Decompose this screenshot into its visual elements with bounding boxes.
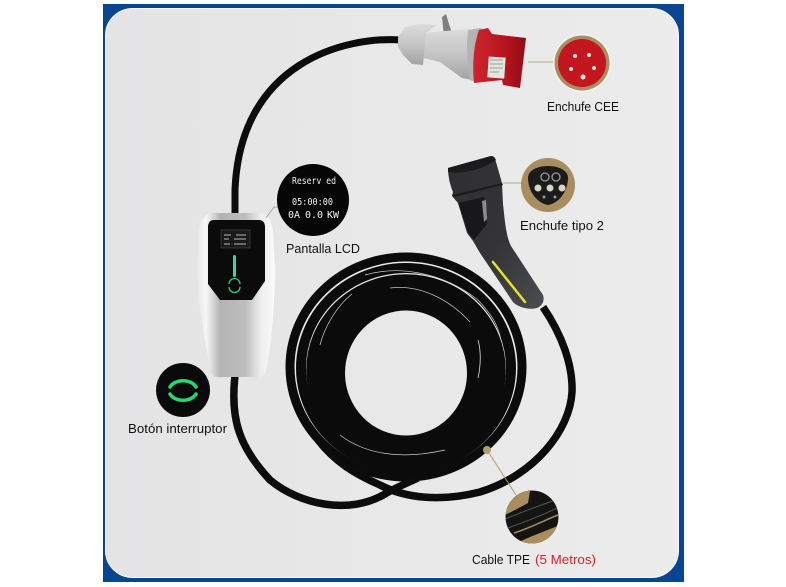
- status light: [233, 255, 236, 277]
- label: Cable TPE (5 Metros): Cable TPE: [472, 553, 530, 567]
- inset: LCD readout: [277, 164, 349, 236]
- display panel: [208, 220, 265, 300]
- cable: handle to coil: [318, 307, 572, 498]
- connector line: LCD: [266, 207, 281, 218]
- inset: CEE socket: [553, 34, 611, 92]
- marker dot: [483, 446, 491, 454]
- inset: cable detail: [505, 490, 560, 546]
- inset: LCD readout: KW: [327, 210, 340, 221]
- label: Cable TPE (5 Metros): (5 Metros): [535, 553, 596, 567]
- small power icon: [229, 278, 240, 292]
- connector line: Type 2: [503, 182, 522, 184]
- inset: LCD readout: 05:00:00: [292, 197, 333, 208]
- light panel: [106, 8, 678, 578]
- cable coil: [290, 257, 522, 477]
- CEE red plug: [398, 14, 526, 88]
- label: Enchufe tipo 2: Enchufe tipo 2: [520, 218, 604, 233]
- inset: Type 2 socket: [521, 158, 575, 212]
- label: Pantalla LCD: Pantalla LCD: [286, 241, 360, 256]
- inset: LCD readout: 0.0: [305, 210, 323, 221]
- label: Cable TPE (5 Metros): [472, 553, 596, 567]
- inset: LCD readout: 0A: [288, 210, 300, 221]
- connector line: cable TPE: [487, 450, 516, 495]
- label: Enchufe CEE: Enchufe CEE: [547, 99, 619, 114]
- cable: plug to control box: [235, 40, 402, 216]
- inset: power button: [156, 363, 210, 417]
- Type 2 connector handle: [448, 156, 544, 309]
- control box: [197, 213, 275, 377]
- cable: control box to coil: [234, 376, 418, 505]
- blue frame: [103, 4, 684, 582]
- label: Botón interruptor: Botón interruptor: [128, 421, 228, 436]
- inset: LCD readout: Reserv ed: [292, 176, 336, 187]
- connector line: CEE: [528, 61, 555, 63]
